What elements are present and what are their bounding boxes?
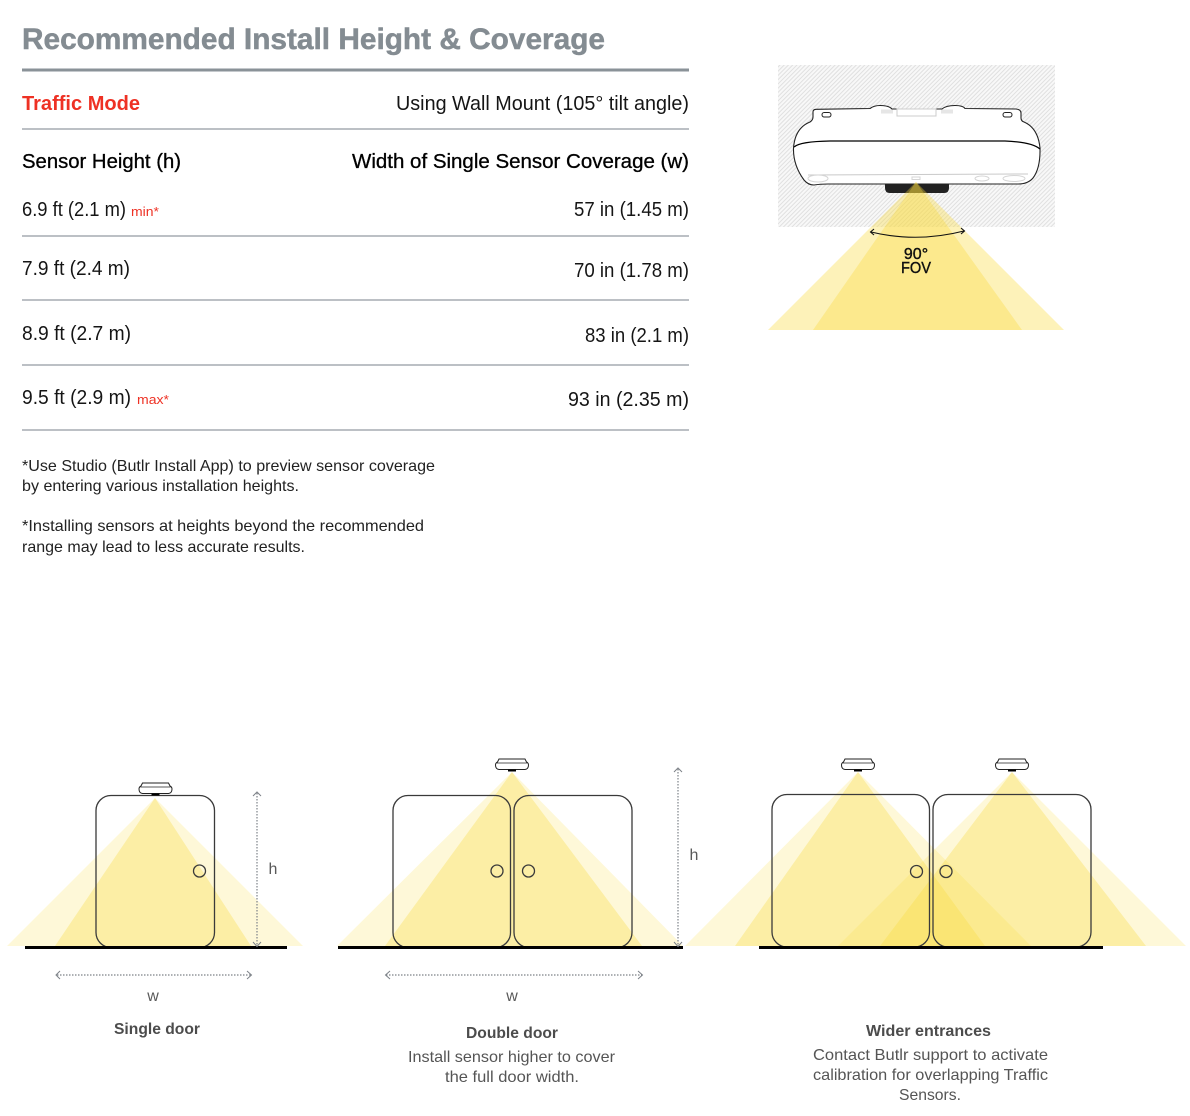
caption: the full door width. — [445, 1069, 579, 1086]
label: h: h — [690, 847, 698, 864]
row: 8.9 ft — [22, 323, 689, 347]
icon: sensor — [496, 759, 528, 772]
caption: Wider entrances — [866, 1023, 991, 1040]
doors — [393, 796, 632, 948]
FOV label: 90° — [904, 246, 928, 263]
icon: sensor body — [793, 106, 1040, 193]
caption: Double door — [466, 1025, 558, 1042]
row: 6.9 ft — [22, 199, 689, 221]
diagram: single door — [7, 783, 303, 1038]
row: 7.9 ft: 70 in (1.78 m) — [574, 260, 689, 282]
arrow: width — [386, 971, 642, 979]
wall — [778, 65, 1055, 227]
floor — [25, 946, 287, 949]
arrow: height — [674, 768, 682, 946]
row: 8.9 ft: 8.9 ft (2.7 m) — [22, 323, 131, 345]
footnote: Studio preview: *Use Studio (Butlr Install App) to preview sensor coverage — [22, 458, 435, 475]
footnote: Studio preview: by entering various installation heights. — [22, 478, 299, 495]
footnote: height range: *Installing sensors at heights beyond the recommended — [22, 518, 424, 535]
row: 6.9 ft: min* — [131, 204, 159, 219]
label: w: w — [505, 988, 518, 1005]
floor — [759, 946, 1103, 949]
coverage cone — [7, 798, 303, 946]
FOV label: FOV — [901, 260, 931, 277]
row: 7.9 ft: 7.9 ft (2.4 m) — [22, 258, 130, 280]
coverage cone: left sensor — [685, 772, 1031, 946]
arrow: height — [253, 792, 261, 946]
diagram: double door — [337, 759, 698, 1086]
icon: left sensor — [842, 759, 874, 772]
icon: sensor — [139, 783, 172, 796]
caption — [813, 1023, 1048, 1104]
FOV label — [901, 246, 931, 277]
footnote: height range: range may lead to less accurate results. — [22, 539, 305, 556]
coverage cone — [337, 772, 683, 946]
row: 9.5 ft — [22, 387, 689, 411]
door — [96, 796, 214, 948]
coverage cone — [768, 182, 1064, 330]
footnote: Studio preview — [22, 458, 435, 495]
diagram: wider entrances — [685, 759, 1186, 1104]
arrow: field of view arc — [870, 228, 964, 237]
caption: Sensors. — [899, 1087, 961, 1104]
column heading: sensor height: Sensor Height (h) — [22, 151, 181, 173]
row: 6.9 ft: 6.9 ft (2.1 m) — [22, 199, 126, 221]
row: 9.5 ft: 9.5 ft (2.9 m) — [22, 387, 131, 409]
caption: Single door — [114, 1021, 200, 1038]
coverage cone: right sensor — [838, 772, 1186, 946]
arrow: width — [56, 971, 252, 979]
row: 7.9 ft — [22, 258, 689, 282]
caption — [408, 1025, 616, 1086]
mode label: Traffic Mode — [22, 93, 140, 115]
column heading: coverage width: Width of Single Sensor Coverage (w) — [352, 151, 689, 173]
label: h: h — [269, 861, 277, 878]
diagram: wall mounted sensor with 90 degree field of view — [768, 65, 1064, 330]
caption: Contact Butlr support to activate — [813, 1047, 1048, 1064]
row: 8.9 ft: 83 in (2.1 m) — [585, 325, 689, 347]
row: 9.5 ft: 93 in (2.35 m) — [568, 389, 689, 411]
title: Recommended Install Height & Coverage — [22, 23, 605, 56]
label: w: w — [146, 988, 159, 1005]
footnote: height range — [22, 518, 424, 556]
caption: calibration for overlapping Traffic — [813, 1067, 1048, 1084]
caption: Install sensor higher to cover — [408, 1049, 616, 1066]
icon: right sensor — [996, 759, 1028, 772]
row: 9.5 ft: max* — [137, 392, 169, 407]
mount description: Using Wall Mount (105° tilt angle) — [396, 93, 689, 115]
table: height and coverage — [22, 93, 689, 430]
row: 6.9 ft: 57 in (1.45 m) — [574, 199, 689, 221]
doors — [772, 794, 1091, 947]
floor — [338, 946, 683, 949]
